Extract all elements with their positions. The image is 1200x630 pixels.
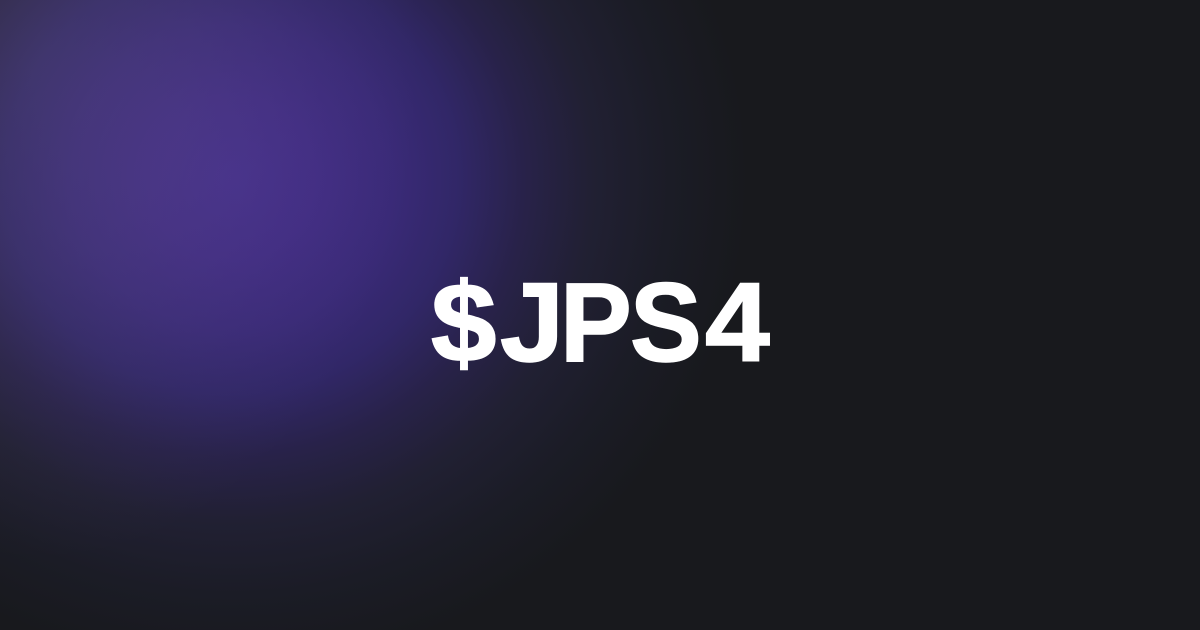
title: $JPS4: S [630, 260, 702, 384]
title: $JPS4 [431, 260, 770, 384]
title: $JPS4: $ [431, 260, 496, 384]
title: $JPS4: J [500, 260, 564, 384]
title: $JPS4: P [560, 260, 632, 384]
title: $JPS4: 4 [705, 260, 770, 384]
